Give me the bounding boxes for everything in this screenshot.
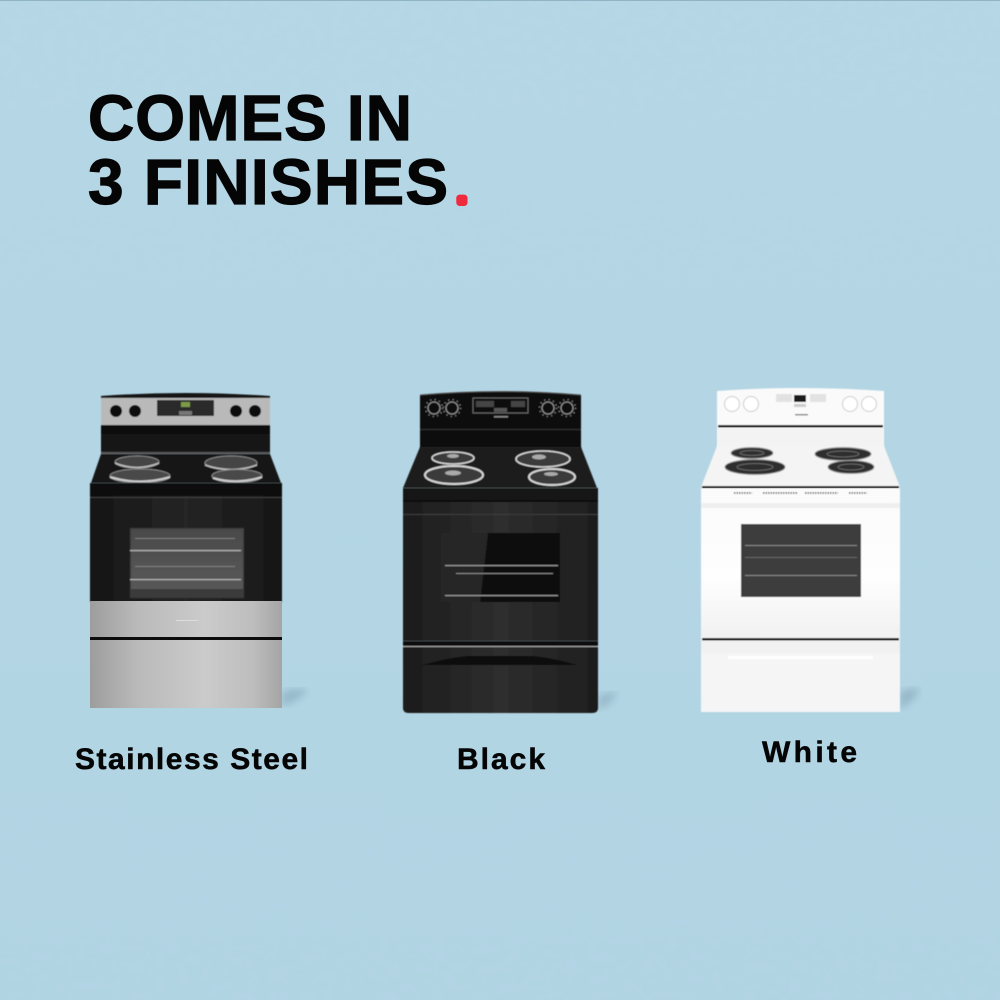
white backguard: [717, 388, 884, 449]
stainless drawer panels: [90, 601, 282, 708]
white drawer: [701, 637, 900, 712]
range: white: [701, 388, 920, 712]
title: [88, 82, 466, 218]
floor shadow: white: [900, 688, 920, 709]
floor shadow: black: [598, 692, 618, 710]
title: 3 FINISHES: [88, 146, 448, 218]
floor shadow: stainless: [282, 689, 308, 706]
black cooktop with burners: [403, 447, 597, 488]
black backguard: [420, 392, 581, 448]
black drawer: [403, 641, 598, 713]
title: .: [458, 176, 466, 210]
label: black: Black: [457, 743, 545, 776]
label: stainless steel: Stainless Steel: [75, 743, 308, 776]
label: white: White: [762, 736, 857, 769]
range: black: [403, 392, 618, 713]
title: COMES IN: [88, 82, 412, 154]
range: stainless steel: [90, 393, 308, 708]
white cooktop with burners: [701, 446, 900, 488]
stainless cooktop with burners: [91, 454, 281, 483]
stainless backguard: [101, 393, 270, 454]
white oven door: [701, 488, 900, 638]
black oven door: [403, 488, 598, 641]
stainless oven door: [90, 483, 282, 602]
